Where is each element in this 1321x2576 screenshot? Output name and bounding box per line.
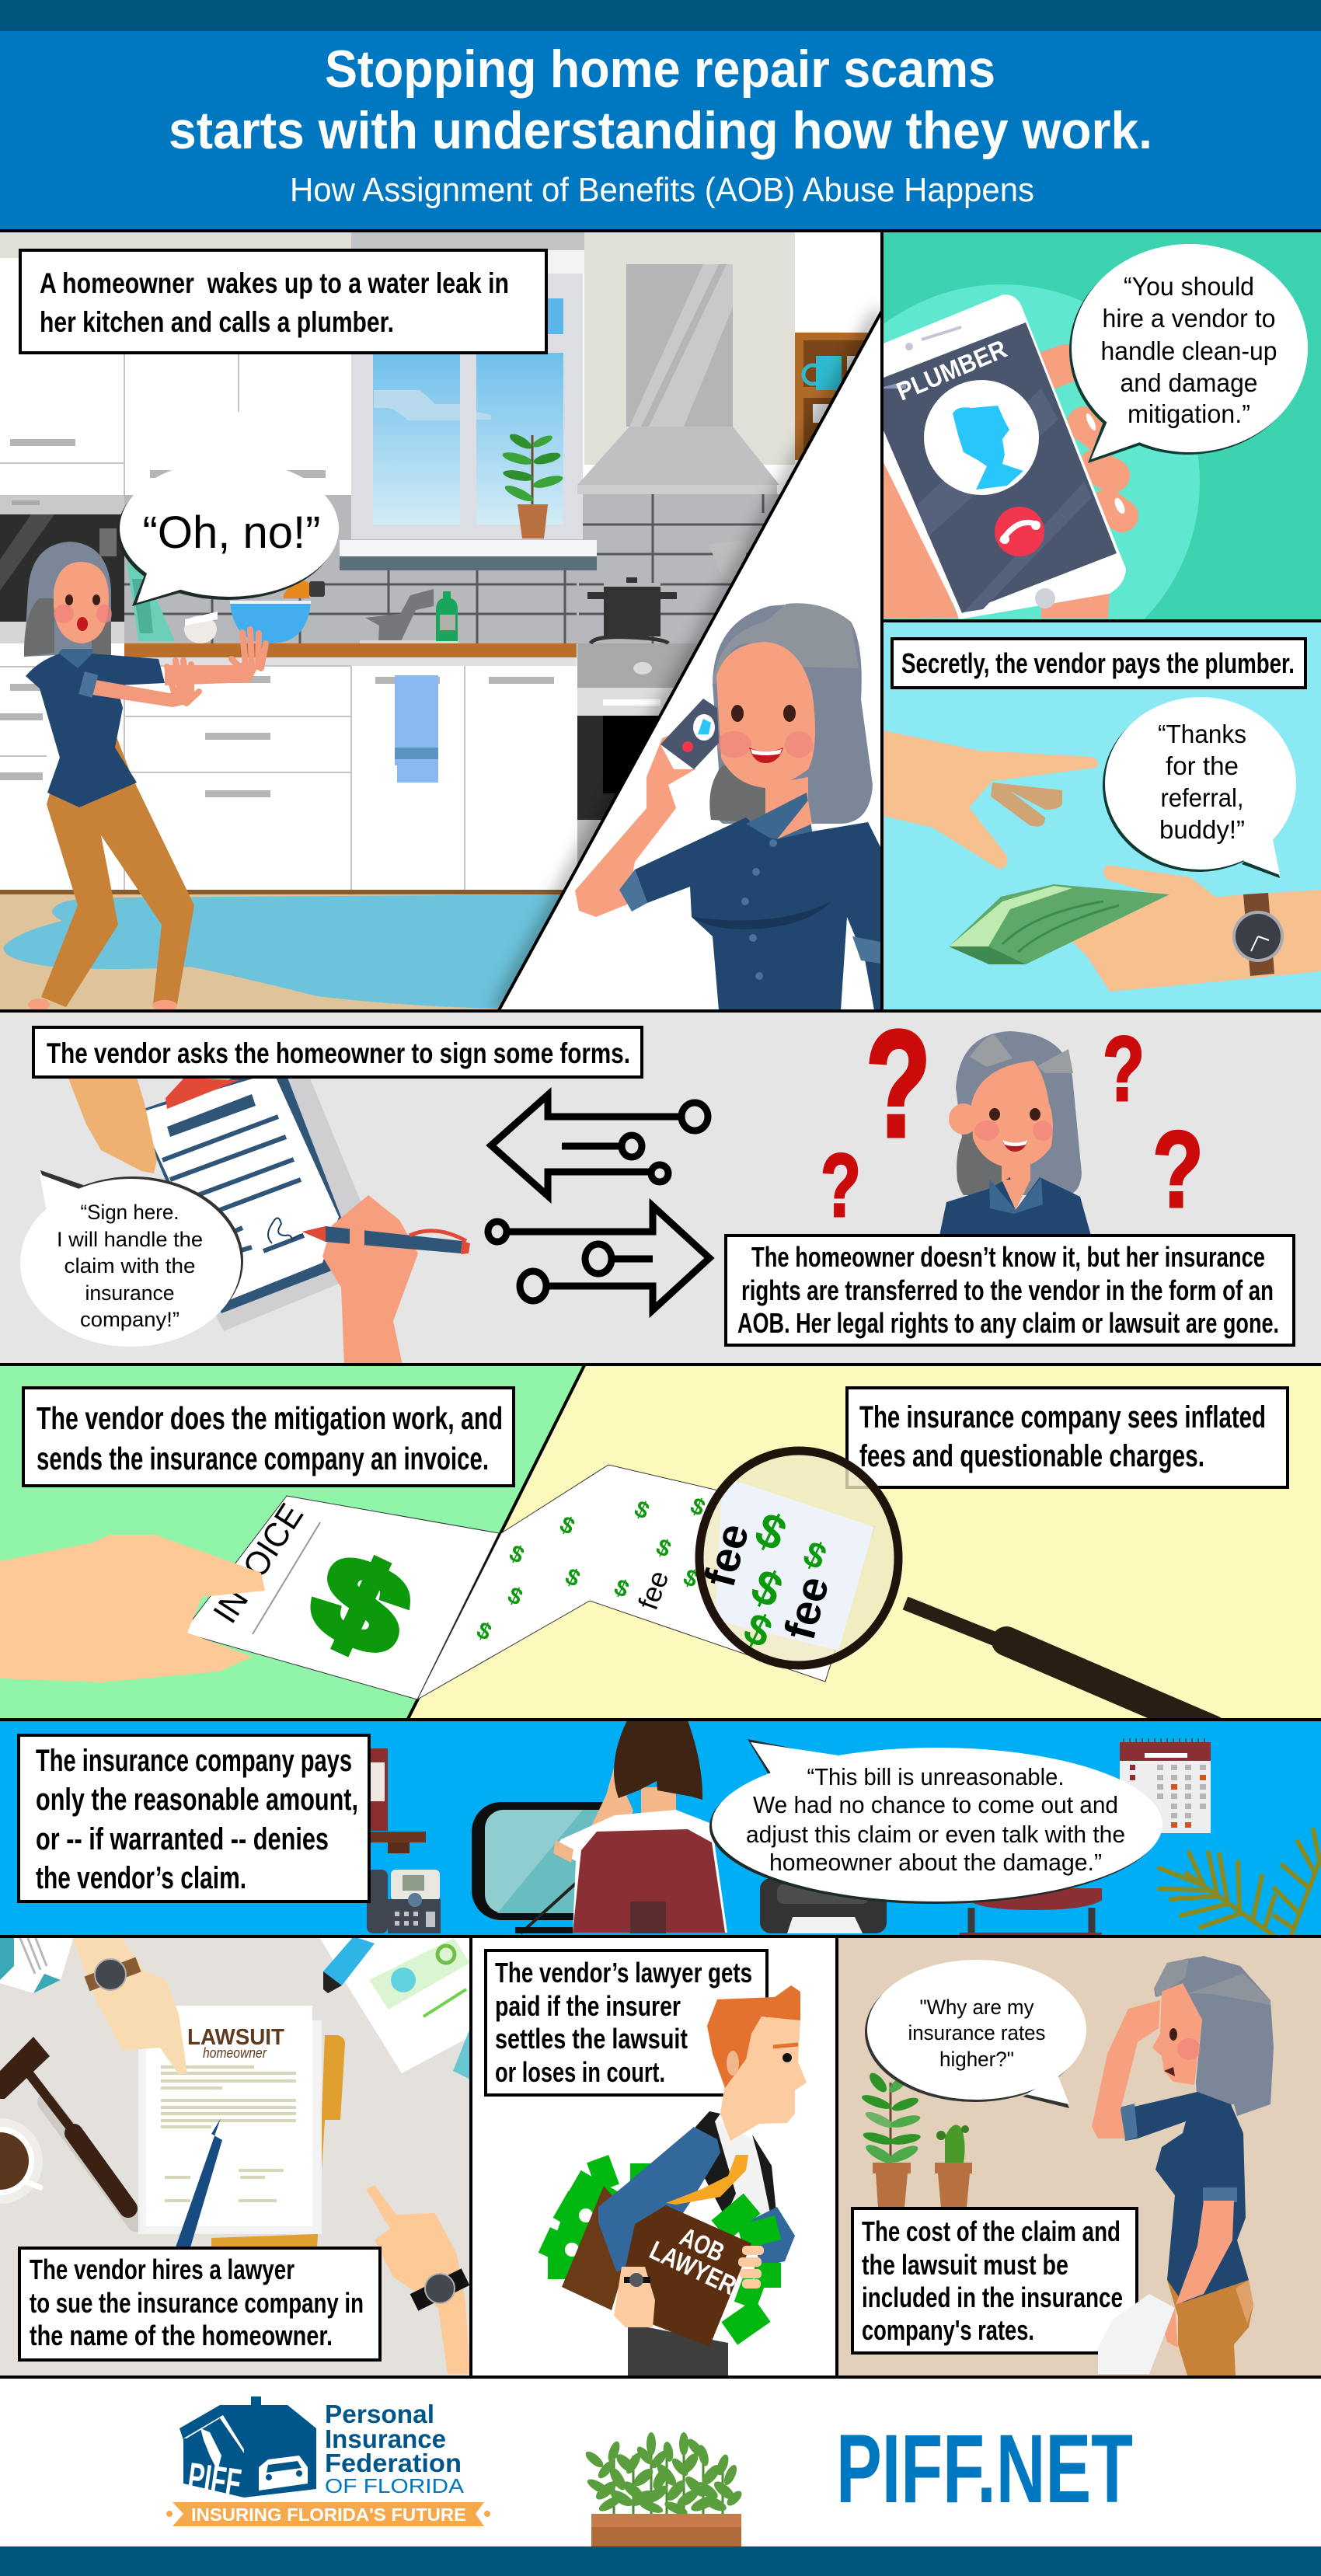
callout box: inflated fees — [847, 1388, 1288, 1487]
computer monitor — [472, 1802, 633, 1933]
speech bubble: hire a vendor: and damage — [1121, 368, 1257, 397]
callout: rates caption: company's rates. — [862, 2314, 1034, 2346]
confused homeowner — [939, 1031, 1091, 1236]
money in front — [711, 2194, 781, 2345]
callout: rates caption: the lawsuit must be — [862, 2249, 1068, 2281]
hand giving money — [949, 865, 1321, 992]
callout: rights transferred caption — [726, 1236, 1294, 1345]
speech bubble: thanks buddy: “Thanks — [1158, 720, 1246, 748]
icon: question marks: ? — [821, 1136, 861, 1236]
icon: car — [259, 2456, 308, 2491]
speech bubble: hire a vendor: hire a vendor to — [1102, 304, 1276, 333]
speech bubble: sign here: “Sign here. — [81, 1201, 179, 1224]
inflated fee sheet: $ — [686, 1493, 709, 1522]
callout: rates caption — [852, 2208, 1137, 2353]
icon: house: PIFF — [185, 2454, 244, 2505]
callout: invoice caption: sends the insurance company an invoice. — [37, 1441, 489, 1476]
panel: kitchen water leak — [0, 232, 882, 1011]
panel: higher rates — [838, 1937, 1321, 2376]
inflated fee sheet: $ — [679, 1564, 702, 1593]
icon: caller avatar — [924, 380, 1039, 495]
speech bubble: why are my rates higher: insurance rates — [908, 2021, 1046, 2044]
header banner — [0, 0, 1321, 230]
briefcase label — [645, 2222, 741, 2301]
speech bubble: sign here: I will handle the — [57, 1228, 203, 1251]
icon: question marks: ? — [1103, 1018, 1145, 1121]
phone label: PLUMBER — [892, 334, 1011, 406]
stove and pot — [577, 540, 746, 891]
speech bubble: Oh, no: “Oh, no!” — [143, 507, 320, 558]
icon: wristwatch — [1232, 893, 1284, 976]
icon: magnifying glass — [695, 1451, 1212, 1730]
callout: rates caption: included in the insurance — [862, 2281, 1123, 2313]
callout: reasonable amount caption: the vendor’s claim. — [36, 1861, 246, 1895]
icon: desk phone — [367, 1870, 441, 1933]
panel: homeowner calling plumber — [499, 311, 882, 1010]
logo wordmark: Personal — [325, 2400, 434, 2428]
callout: invoice caption: The vendor does the mitigation work, and — [37, 1400, 503, 1436]
title — [169, 40, 1152, 160]
callout: lawyer paid caption: The vendor’s lawyer gets — [495, 1957, 752, 1989]
speech bubble: sign here: claim with the — [64, 1254, 196, 1278]
countertop items — [127, 561, 458, 644]
hand holding phone — [884, 364, 1127, 619]
icon: question marks: ? — [1152, 1108, 1204, 1230]
panel: signing forms — [0, 999, 1321, 1365]
speech bubble: hire a vendor: “You should — [1124, 272, 1254, 301]
callout: reasonable amount caption: The insurance company pays — [36, 1744, 352, 1778]
upper cabinets — [0, 354, 326, 514]
inflated fee sheet: $ — [561, 1563, 584, 1592]
title: Stopping home repair scams — [325, 40, 995, 99]
document subtitle: homeowner — [203, 2045, 267, 2061]
icon: magnifying glass: $ — [744, 1559, 790, 1619]
panel: vendor hires a lawyer — [0, 1936, 470, 2376]
icon: magnifying glass: $ — [797, 1532, 833, 1577]
callout: sign forms caption — [33, 1027, 642, 1077]
inflated fees caption text: fees and questionable charges. — [859, 1439, 1204, 1473]
speech bubble: sign here — [20, 1170, 243, 1347]
speech bubble: bill is unreasonable: We had no chance to come out and — [753, 1791, 1118, 1818]
inflated fee sheet: $ — [505, 1540, 528, 1569]
footer — [0, 2378, 1321, 2576]
logo wordmark: Insurance — [325, 2424, 446, 2453]
hand holding clipboard — [66, 1072, 157, 1173]
inflated fee sheet: $ — [472, 1617, 496, 1646]
icon: planter — [583, 2432, 744, 2546]
subtitle: How Assignment of Benefits (AOB) Abuse Happens — [290, 171, 1034, 209]
logo tagline banner: INSURING FLORIDA'S FUTURE — [191, 2505, 466, 2525]
kitchen diagonal shadow — [499, 313, 880, 1010]
callout: reasonable amount caption: only the reasonable amount, — [36, 1783, 358, 1817]
callout: sign forms caption: The vendor asks the homeowner to sign some forms. — [47, 1037, 630, 1069]
speech bubble: thanks buddy: referral, — [1161, 783, 1243, 812]
speech bubble: hire a vendor — [1069, 244, 1308, 463]
callout: lawyer paid caption: settles the lawsuit — [495, 2023, 688, 2055]
logo: PIFF — [166, 2396, 490, 2526]
title: starts with understanding how they work. — [169, 101, 1152, 160]
speech bubble: sign here: insurance — [85, 1281, 174, 1305]
icon: palm fronds — [1159, 1830, 1321, 1939]
speech bubble: Oh, no — [117, 460, 339, 606]
callout: vendor hires lawyer caption — [19, 2248, 380, 2360]
arm and raised hand, near — [78, 661, 199, 707]
hand receiving — [884, 730, 1098, 869]
wall shelf with cups — [795, 333, 868, 460]
dish towel — [395, 675, 438, 783]
logo wordmark: Federation — [325, 2449, 462, 2477]
inflated fee sheet: $ — [556, 1511, 579, 1540]
inflated fee sheet: fee — [632, 1567, 674, 1614]
speech bubble: hire a vendor: mitigation.” — [1128, 399, 1250, 428]
report with charts — [320, 1938, 470, 2079]
callout: lawyer paid caption — [486, 1950, 767, 2095]
inflated fee sheet: $ — [610, 1574, 633, 1603]
office shelf and binder — [365, 1748, 426, 1853]
speech bubble: why are my rates higher: higher?" — [939, 2048, 1014, 2071]
lawyer carrying money briefcase — [539, 1985, 807, 2376]
arrow: left pointing circuit arrow — [491, 1095, 708, 1196]
icon: end call button — [995, 507, 1044, 556]
icon: magnifying glass: fee — [775, 1571, 838, 1644]
microwave — [0, 514, 124, 643]
speech bubble: why are my rates higher: "Why are my — [920, 1996, 1034, 2019]
callout: vendor hires lawyer caption: the name of the homeowner. — [30, 2320, 333, 2351]
money spilling out — [539, 2155, 652, 2279]
visitor chair — [960, 1888, 1102, 1936]
callout: invoice caption — [23, 1388, 514, 1486]
speech bubble: bill is unreasonable: “This bill is unreasonable. — [807, 1763, 1065, 1790]
folder and lawsuit document — [138, 2006, 345, 2247]
callout: kitchen caption — [20, 250, 546, 353]
window — [340, 274, 597, 570]
speech bubble: bill is unreasonable — [709, 1739, 1162, 1904]
inflated fee sheet — [417, 1465, 874, 1699]
callout: vendor hires lawyer caption: The vendor hires a lawyer — [30, 2254, 295, 2285]
briefcase label: LAWYER — [645, 2236, 741, 2301]
callout: vendor hires lawyer caption: to sue the insurance company in — [30, 2287, 364, 2319]
panel: vendor pays plumber — [884, 622, 1321, 1010]
office worker at desk — [553, 1720, 727, 1933]
icon: house — [180, 2396, 316, 2505]
callout: lawyer paid caption: or loses in court. — [495, 2056, 665, 2088]
callout: lawyer paid caption: paid if the insurer — [495, 1990, 681, 2022]
phone — [884, 295, 1126, 619]
callout: reasonable amount caption — [19, 1735, 369, 1901]
speech bubble: sign here: company!” — [80, 1308, 180, 1331]
hand holding invoice — [0, 1535, 265, 1682]
arm and raised hand, far — [165, 629, 266, 685]
icon: wall calendar — [1120, 1738, 1211, 1833]
callout: kitchen caption: her kitchen and calls a plumber. — [40, 306, 394, 338]
homeowner on phone — [575, 603, 880, 1010]
inflated fee sheet: $ — [652, 1534, 675, 1563]
icon: window plant — [501, 431, 564, 539]
website: PIFF.NET — [836, 2415, 1133, 2523]
panel: vendor's lawyer — [472, 1937, 836, 2376]
icon: marker — [323, 1936, 375, 1993]
speech bubble: thanks buddy — [1103, 697, 1296, 878]
callout: reasonable amount caption: or -- if warranted -- denies — [36, 1822, 329, 1856]
icon: pen — [176, 2118, 222, 2247]
icon: potted plants — [860, 2070, 972, 2208]
speech bubble: thanks buddy: for the — [1166, 751, 1239, 780]
icon: magnifying glass: $ — [737, 1602, 779, 1657]
callout: kitchen caption: A homeowner wakes up to a water leak in — [40, 267, 509, 299]
invoice sheet: INVOICE — [206, 1497, 311, 1630]
callout: rates caption: The cost of the claim and — [862, 2215, 1121, 2247]
speech bubble: thanks buddy: buddy!” — [1159, 815, 1245, 844]
document title: LAWSUIT — [187, 2025, 284, 2050]
logo tagline banner — [166, 2502, 490, 2526]
floor and water puddle — [0, 890, 882, 1010]
base cabinets — [0, 643, 577, 892]
logo wordmark — [325, 2400, 465, 2498]
inflated fees caption text — [859, 1400, 1266, 1473]
callout: vendor pays caption — [892, 639, 1305, 688]
hand pointing at lawsuit — [72, 1938, 187, 2075]
briefcase label: AOB — [675, 2222, 729, 2268]
hand with pen — [302, 1195, 470, 1365]
arrow: right pointing circuit arrow — [488, 1206, 709, 1310]
speech bubble: hire a vendor: handle clean-up — [1100, 336, 1277, 365]
range hood — [577, 264, 779, 494]
speech bubble: bill is unreasonable: adjust this claim or even talk with the — [746, 1821, 1125, 1848]
icon: magnifying glass: $ — [748, 1502, 794, 1562]
icon: paper in hand — [1098, 2294, 1175, 2374]
icon: coffee cup — [0, 2118, 43, 2204]
inflated fee sheet: $ — [630, 1496, 654, 1525]
clipboard — [137, 1061, 365, 1331]
inflated fee sheet: $ — [504, 1582, 527, 1611]
panel: invoice and inflated fees — [0, 1365, 1321, 1730]
homeowner panicking — [24, 542, 266, 1011]
icon: magnifying glass: fee — [695, 1518, 758, 1591]
speech bubble: why are my rates higher — [865, 1960, 1086, 2108]
invoice sheet — [183, 1496, 499, 1699]
panel: insurer reviews claim — [0, 1720, 1321, 1939]
panel: plumber phone call — [805, 232, 1321, 679]
speech bubble: bill is unreasonable: homeowner about the damage.” — [769, 1849, 1102, 1876]
hand pointing from below — [366, 2185, 470, 2374]
icon: question marks — [821, 999, 1204, 1236]
icon: question marks: ? — [866, 999, 931, 1169]
invoice sheet: $ — [295, 1527, 428, 1682]
icon: gavel — [0, 2037, 136, 2222]
icon: printer — [760, 1878, 887, 1933]
icon: loose papers — [0, 1936, 74, 1993]
logo wordmark: OF FLORIDA — [325, 2474, 465, 2498]
worried homeowner — [1092, 1956, 1274, 2376]
